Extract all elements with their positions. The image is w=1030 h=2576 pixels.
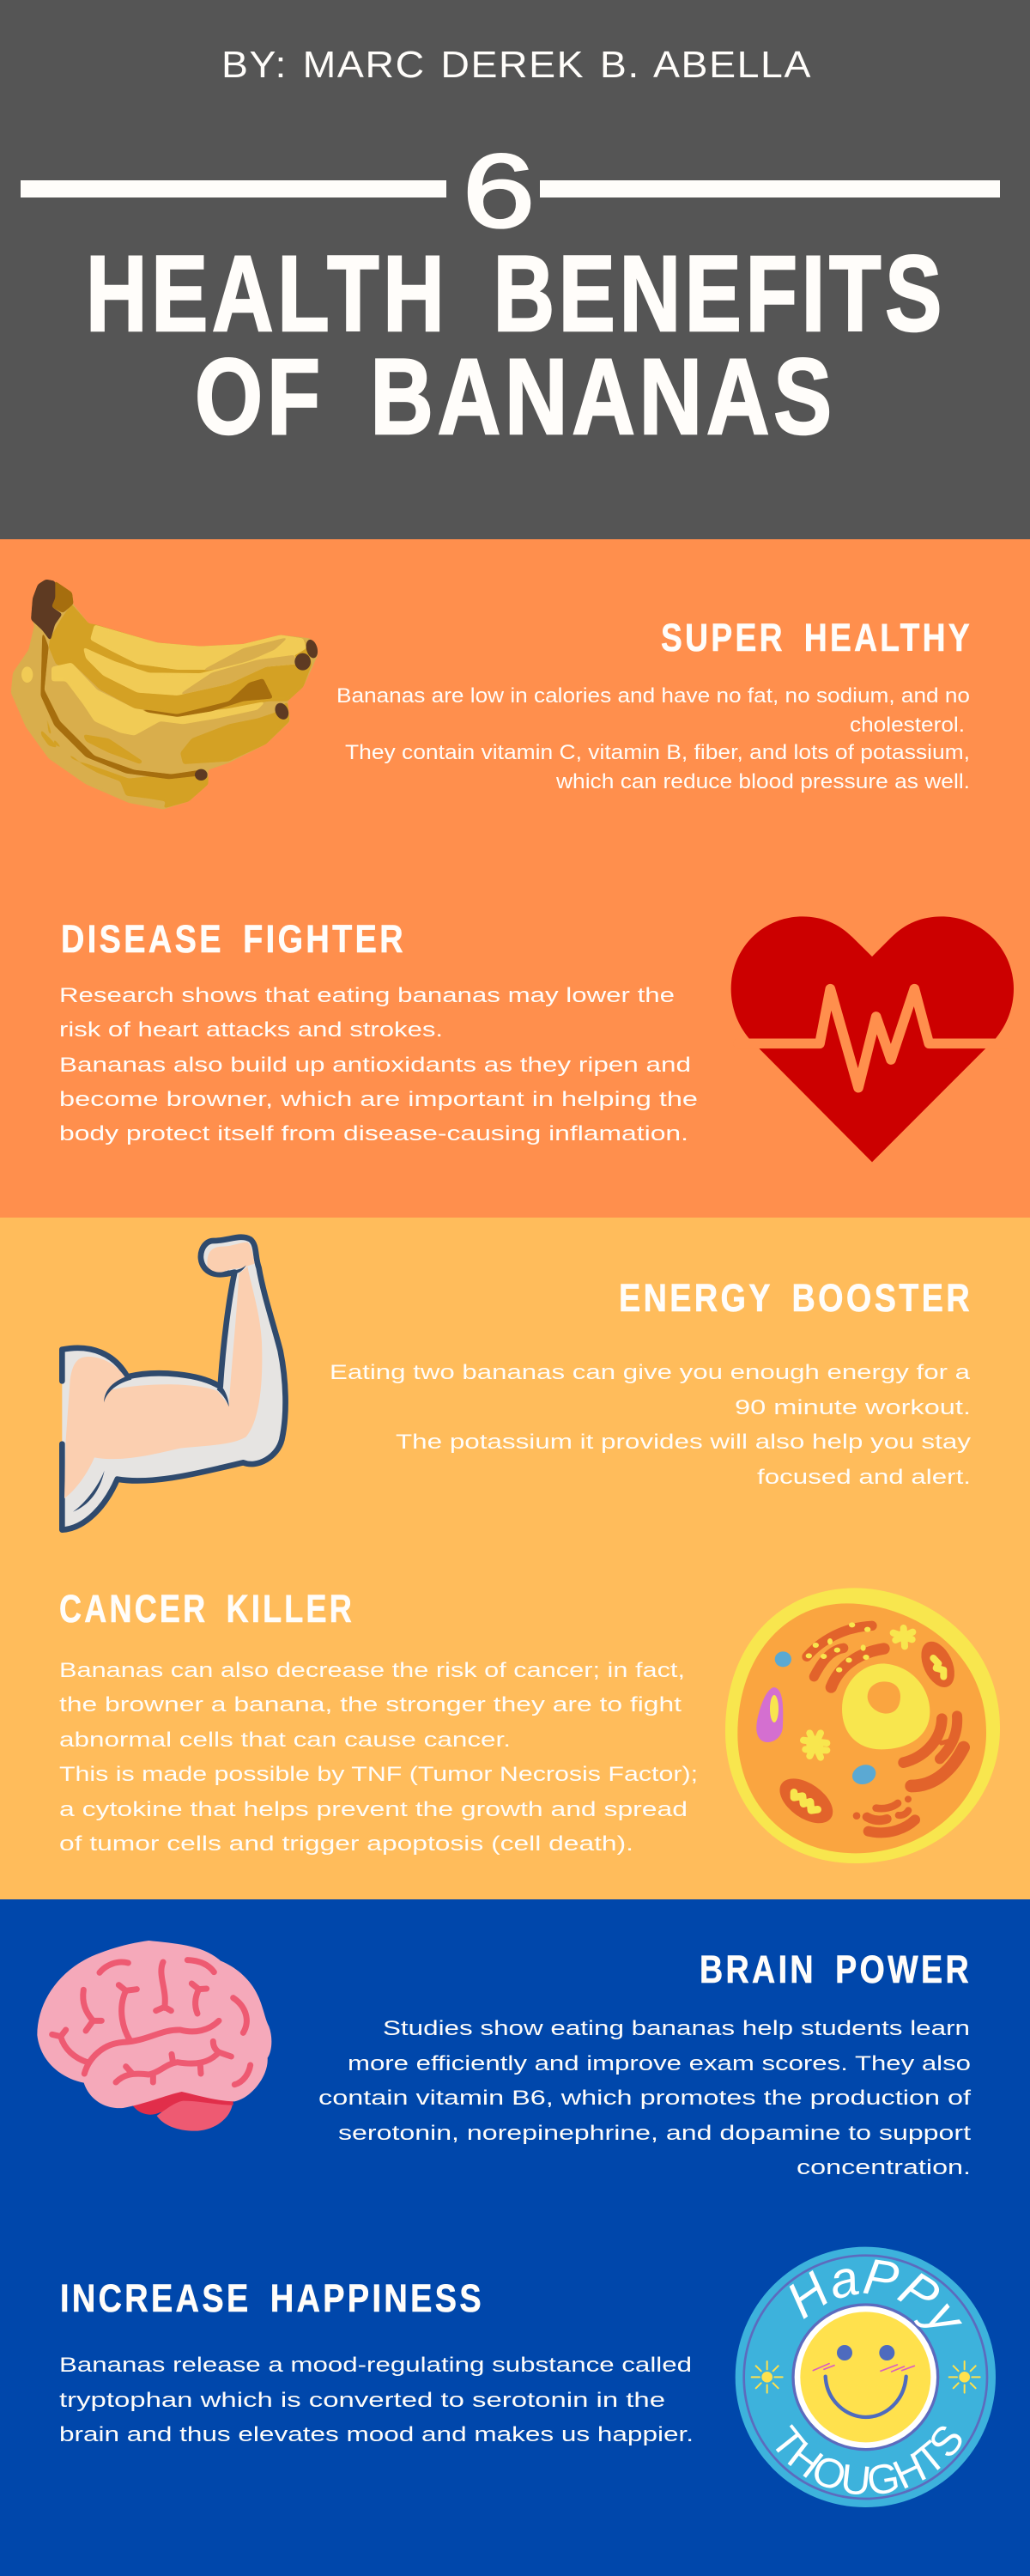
heading: energy booster: ENERGY BOOSTER xyxy=(619,1276,972,1320)
heading: super healthy: SUPER HEALTHY xyxy=(661,616,972,659)
text: disease fighter body: Research shows that eating bananas may lower the xyxy=(59,984,675,1007)
text: super healthy body xyxy=(336,684,970,793)
icon: heart with pulse xyxy=(731,916,1014,1162)
panel: yellow section xyxy=(0,1218,1030,1899)
text: increase happiness body: brain and thus elevates mood and makes us happier. xyxy=(59,2423,694,2446)
text: cancer killer body xyxy=(59,1659,698,1856)
heading: cancer killer: CANCER KILLER xyxy=(59,1587,354,1631)
text: energy booster body: Eating two bananas can give you enough energy for a xyxy=(330,1361,971,1384)
text: energy booster body: The potassium it provides will also help you stay xyxy=(396,1431,971,1454)
text: super healthy body: cholesterol. xyxy=(850,714,965,737)
title line two: OF BANANAS xyxy=(195,337,836,457)
text: increase happiness body xyxy=(59,2354,694,2446)
number six: 6 xyxy=(463,132,535,249)
text: brain power body xyxy=(318,2017,971,2179)
text: brain power body: serotonin, norepinephrine, and dopamine to support xyxy=(338,2122,971,2145)
text: increase happiness body: tryptophan which is converted to serotonin in the xyxy=(59,2389,665,2412)
right title rule xyxy=(540,180,1000,197)
text: energy booster body xyxy=(330,1361,971,1489)
text: disease fighter body xyxy=(59,984,698,1145)
text: brain power body: more efficiently and improve exam scores. They also xyxy=(348,2052,971,2075)
heading: increase happiness: INCREASE HAPPINESS xyxy=(60,2276,484,2320)
text: disease fighter body: risk of heart attacks and strokes. xyxy=(59,1018,443,1042)
text: energy booster body: 90 minute workout. xyxy=(735,1396,971,1419)
panel: title header xyxy=(0,0,1030,539)
text: cancer killer body: Bananas can also decrease the risk of cancer; in fact, xyxy=(59,1659,685,1682)
icon: happy thoughts badge xyxy=(735,2246,996,2507)
text: disease fighter body: become browner, which are important in helping the xyxy=(59,1088,698,1111)
text: disease fighter body: body protect itself from disease-causing inflamation. xyxy=(59,1122,688,1145)
text: brain power body: concentration. xyxy=(797,2156,971,2179)
text: increase happiness body: Bananas release a mood-regulating substance called xyxy=(59,2354,692,2377)
icon: flexed arm xyxy=(62,1237,286,1530)
panel: blue section xyxy=(0,1899,1030,2576)
heading: brain power: BRAIN POWER xyxy=(700,1947,972,1991)
icon: brain xyxy=(37,1941,271,2131)
text: brain power body: contain vitamin B6, which promotes the production of xyxy=(318,2087,971,2110)
text: energy booster body: focused and alert. xyxy=(757,1466,971,1489)
text: super healthy body: Bananas are low in calories and have no fat, no sodium, and no xyxy=(336,684,970,708)
text: cancer killer body: of tumor cells and trigger apoptosis (cell death). xyxy=(59,1832,633,1856)
text: super healthy body: They contain vitamin C, vitamin B, fiber, and lots of potassium, xyxy=(345,741,970,764)
text: brain power body: Studies show eating bananas help students learn xyxy=(383,2017,970,2040)
text: cancer killer body: abnormal cells that can cause cancer. xyxy=(59,1728,511,1752)
text: disease fighter body: Bananas also build up antioxidants as they ripen and xyxy=(59,1054,691,1077)
text: cancer killer body: This is made possible by TNF (Tumor Necrosis Factor); xyxy=(59,1763,698,1786)
text: cancer killer body: the browner a banana, the stronger they are to fight xyxy=(59,1693,682,1716)
panel: orange section xyxy=(0,539,1030,1218)
left title rule xyxy=(21,180,446,197)
icon: banana bunch xyxy=(11,580,319,810)
heading: disease fighter: DISEASE FIGHTER xyxy=(61,917,406,961)
text: cancer killer body: a cytokine that helps prevent the growth and spread xyxy=(59,1798,688,1821)
text: super healthy body: which can reduce blood pressure as well. xyxy=(555,770,970,793)
icon: happy thoughts badge: HaPPy xyxy=(790,2259,962,2328)
icon: happy thoughts badge: THOUGHTS xyxy=(776,2424,961,2494)
author byline: BY: MARC DEREK B. ABELLA xyxy=(221,44,812,86)
icon: human cell xyxy=(725,1588,1000,1863)
